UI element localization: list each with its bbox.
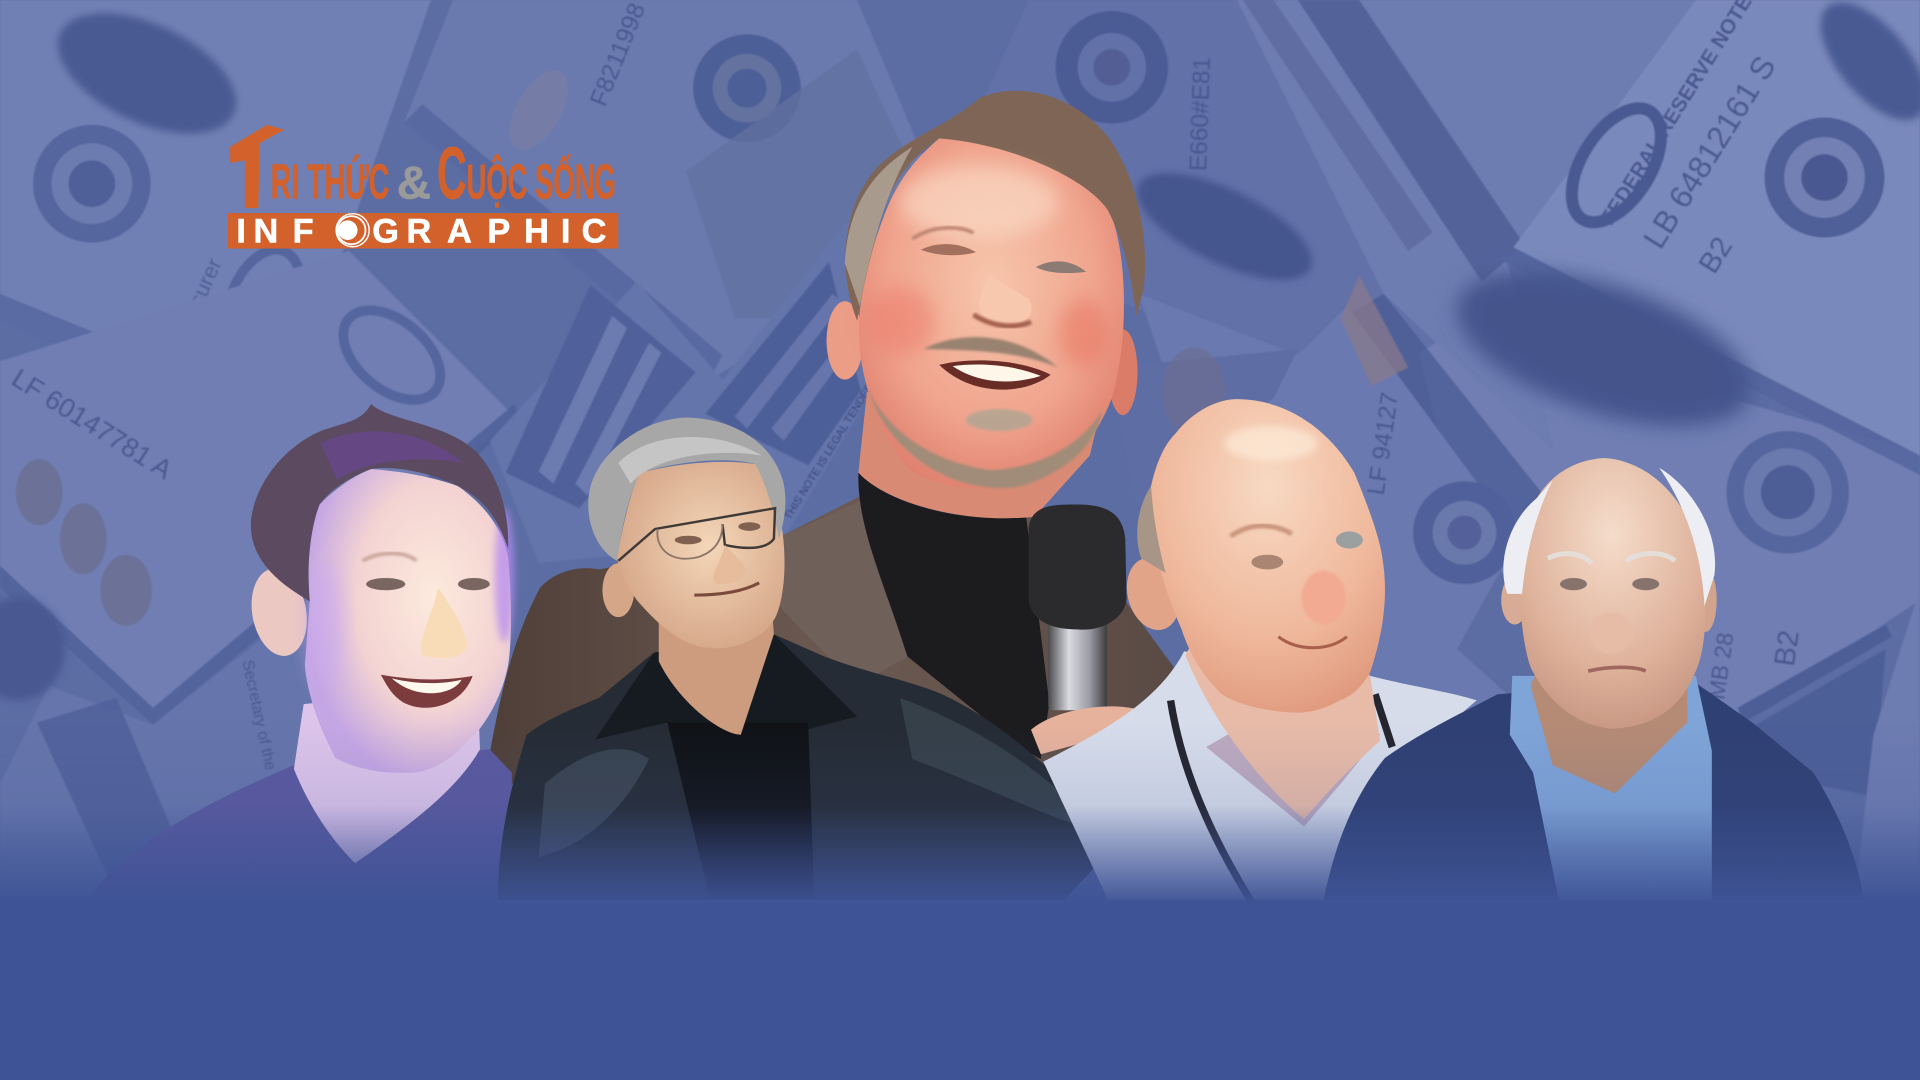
right ear (1108, 329, 1138, 415)
banknote: upper left: Treasurer (165, 254, 227, 351)
head highlight (1224, 426, 1318, 460)
hand (1031, 706, 1141, 754)
banknote: centre right: LF 94127 (1363, 391, 1404, 497)
neck (1185, 618, 1380, 819)
right ear (1695, 568, 1717, 632)
t-shirt (92, 749, 512, 900)
side hair (1137, 486, 1166, 573)
eyes and brows (1560, 578, 1587, 590)
cheeks (866, 287, 934, 355)
banknote: upper centre: F8211998 (585, 0, 651, 110)
hair (845, 91, 1145, 321)
logo: Tri Thuc & Cuoc Song Infographic: GRAPHIC (372, 212, 606, 250)
neck (1531, 661, 1687, 793)
logo: Tri Thuc & Cuoc Song Infographic: UỘC SỐNG (467, 154, 616, 209)
nose (979, 276, 1032, 323)
banknote: top middle right: E660#E81 (1185, 56, 1216, 172)
logo ampersand: & (397, 156, 431, 208)
logo banner text: INF (236, 212, 314, 250)
leather jacket (497, 634, 1108, 900)
banknote: lower right (1408, 306, 1920, 735)
shirt (1510, 676, 1712, 900)
lanyard (1171, 700, 1253, 904)
banknote: lower left: Secretary of the Treasury (239, 659, 292, 837)
white hair (1503, 480, 1553, 594)
person: Mark Zuckerberg, left (92, 404, 514, 900)
left ear (245, 564, 313, 660)
logo wordmark: Tri Thuc: RI THỨC (271, 154, 389, 209)
banknote: middle left (0, 251, 520, 725)
banknote: lower right: MB 28 (1703, 631, 1738, 701)
banknote: middle left: LF 60147781 A (7, 363, 177, 485)
person: Steve Ballmer, centre right (1043, 399, 1477, 904)
logo banner (228, 213, 618, 249)
nose (421, 588, 468, 658)
person: Larry Ellison, centre (490, 91, 1183, 784)
mouth (939, 360, 1051, 390)
banknote: centre left engraving: THIS NOTE IS LEGAL TENDER (782, 381, 876, 522)
banknote: upper right: LB 64812161 S (1636, 50, 1783, 255)
moustache (923, 337, 1058, 367)
eyes (366, 578, 405, 590)
smile (1278, 637, 1347, 648)
logo mark: T swoosh (230, 125, 284, 208)
banknote: lower right: B2 (1768, 628, 1806, 668)
logo wordmark: Cuoc Song: C (437, 131, 467, 214)
left ear (1119, 552, 1188, 636)
mouth (1588, 667, 1646, 671)
cardigan (1324, 680, 1864, 900)
banknote: upper right (1500, 0, 1920, 475)
person: Amancio Ortega, right (1324, 458, 1864, 900)
hair (251, 404, 508, 601)
banknote: top right strip (1237, 0, 1714, 453)
person: Jensen Huang, centre left (497, 418, 1108, 900)
eyes (675, 536, 702, 544)
eyes (1251, 555, 1283, 569)
banknote: centre left engraving (490, 208, 931, 563)
beard stubble (867, 386, 1102, 488)
blazer (490, 496, 1183, 784)
hair (588, 418, 785, 561)
microphone handle (1048, 606, 1107, 710)
head (1518, 458, 1706, 729)
nose (1302, 571, 1346, 624)
banknote: lower left (0, 478, 514, 894)
left ear (827, 301, 863, 380)
neck (858, 392, 1100, 518)
banknote: portrait engraving right (1341, 241, 1769, 533)
face (617, 462, 785, 648)
shirt (1043, 651, 1477, 900)
banknote: top middle right (967, 0, 1506, 404)
neck and chest (294, 686, 480, 863)
face (859, 136, 1124, 489)
mouth (381, 675, 473, 708)
bottom fade panel (0, 722, 1920, 906)
logo O swirl icon (336, 214, 369, 247)
banknote: upper left (0, 0, 431, 443)
forehead highlight (900, 165, 1059, 239)
nose (1589, 612, 1633, 654)
face (305, 469, 511, 773)
left ear (1501, 576, 1528, 624)
banknote: centre right (1108, 276, 1518, 882)
glasses (618, 508, 775, 561)
microphone foam (1029, 504, 1127, 630)
bottom solid band (0, 904, 1920, 1080)
banknote: upper right: B2 (1692, 231, 1739, 279)
turtleneck (858, 473, 1049, 759)
left ear (602, 563, 634, 617)
banknote: lower right corner (1739, 588, 1920, 894)
head (1151, 399, 1385, 713)
banknote: upper centre (404, 0, 955, 380)
lilac light (307, 563, 342, 686)
eyes (921, 244, 976, 255)
neck (659, 600, 774, 735)
nose and smile (713, 545, 745, 584)
logo: Tri Thuc & Cuoc Song Infographic (228, 125, 618, 250)
